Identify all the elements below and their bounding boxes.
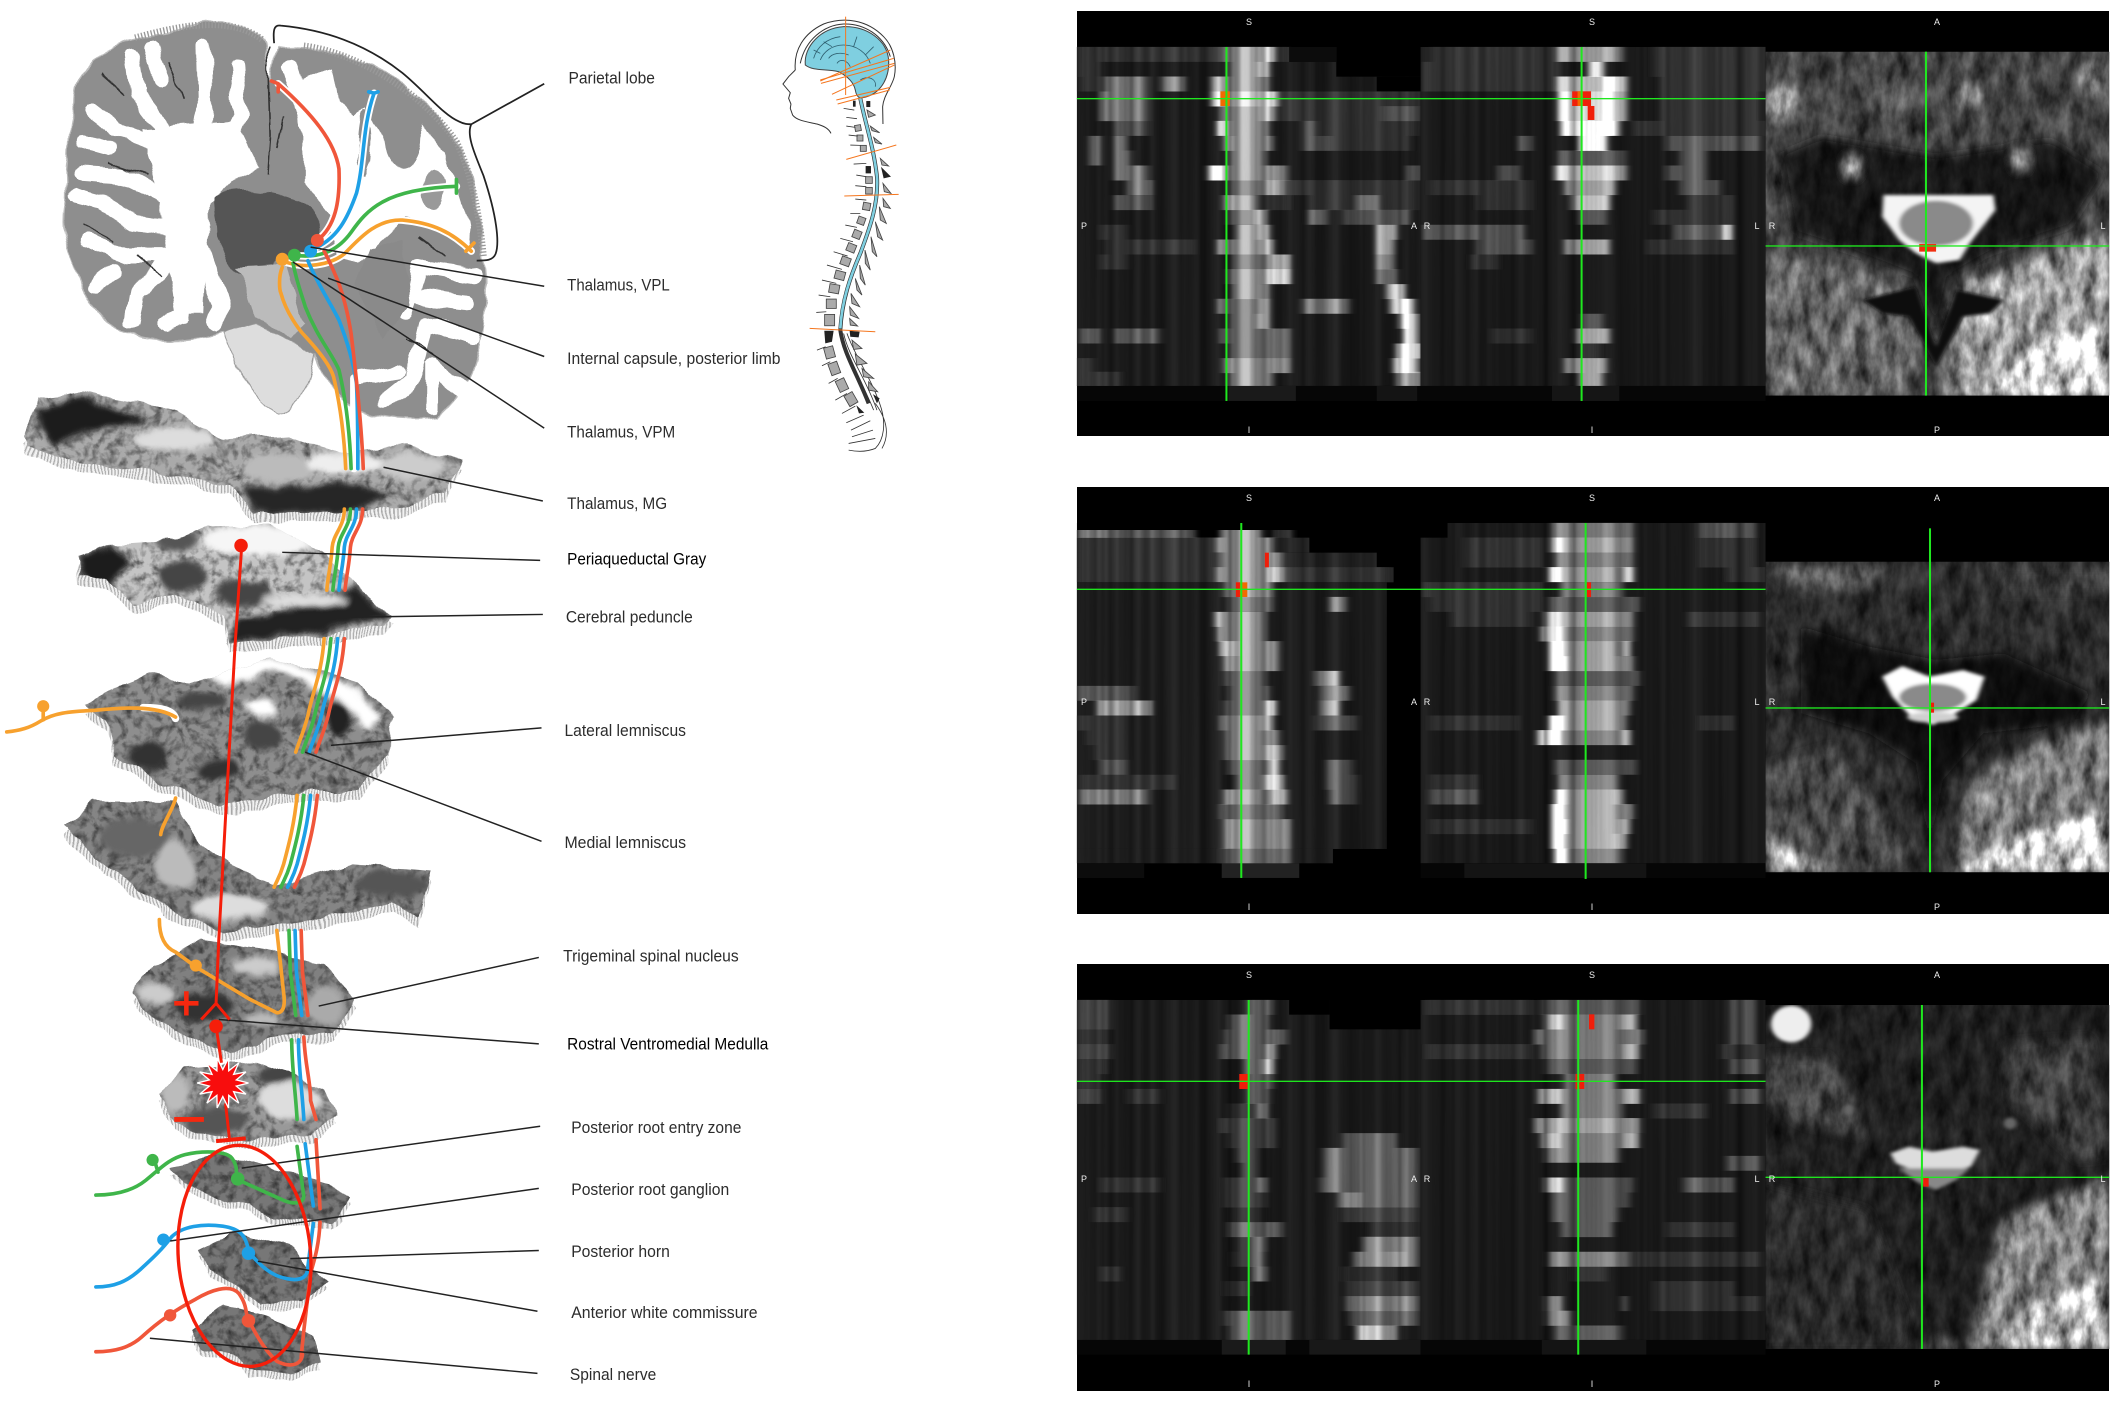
label: Posterior root entry zone: Posterior root entry zone xyxy=(571,1118,741,1137)
orientation letters set 3: P xyxy=(1934,1379,1940,1389)
orientation letters set 2: I xyxy=(1248,902,1250,912)
orientation letters set 1: S xyxy=(1246,17,1252,27)
label: Parietal lobe: Parietal lobe xyxy=(569,69,655,88)
label: Medial lemniscus: Medial lemniscus xyxy=(564,833,686,852)
first-order afferent: blue xyxy=(96,1223,313,1287)
crosshairs xyxy=(1077,47,2109,401)
lumbar cord slice xyxy=(189,1306,321,1380)
bracket: parietal lobe xyxy=(274,25,544,261)
panel: MRI set 2 xyxy=(1077,487,2109,914)
label: Thalamus, VPM: Thalamus, VPM xyxy=(567,423,675,442)
orientation letters set 3: P xyxy=(1081,1174,1087,1184)
orientation letters set 1: I xyxy=(1591,425,1593,435)
orientation letters set 1: R xyxy=(1769,221,1776,231)
label: Posterior horn: Posterior horn xyxy=(571,1242,670,1261)
label: Spinal nerve: Spinal nerve xyxy=(570,1365,656,1384)
pons slice xyxy=(84,657,392,816)
orientation letters set 2: L xyxy=(1754,697,1760,707)
upper medulla slice xyxy=(63,801,432,941)
orientation letters set 1: I xyxy=(1248,425,1250,435)
orientation letters set 3: R xyxy=(1769,1174,1776,1184)
label: Anterior white commissure: Anterior white commissure xyxy=(571,1303,758,1322)
cervical cord slice xyxy=(173,1155,348,1229)
coronal view xyxy=(1421,1000,1766,1355)
caudal medulla slice xyxy=(159,1060,338,1149)
orientation letters set 2: I xyxy=(1591,902,1593,912)
orientation letters set 2: R xyxy=(1769,697,1776,707)
orientation letters set 1: R xyxy=(1424,221,1431,231)
label: Trigeminal spinal nucleus: Trigeminal spinal nucleus xyxy=(563,946,739,965)
label: Internal capsule: Internal capsule, posterior limb xyxy=(567,349,781,368)
orientation letters set 2: A xyxy=(1934,493,1940,503)
leader lines xyxy=(150,247,544,1373)
label: Thalamus, MG: Thalamus, MG xyxy=(567,494,667,513)
orientation letters set 1: P xyxy=(1081,221,1087,231)
orientation letters set 2: P xyxy=(1934,902,1940,912)
sagittal view xyxy=(1077,1000,1421,1355)
orientation letters set 1 xyxy=(1081,17,2106,435)
orientation letters set 1: L xyxy=(1754,221,1760,231)
axial view xyxy=(1764,52,2111,396)
orientation letters set 1: A xyxy=(1411,221,1417,231)
label: Rostral Ventromedial Medulla: Rostral Ventromedial Medulla xyxy=(567,1034,769,1053)
crosshairs xyxy=(1077,1000,2109,1355)
orientation letters set 2: S xyxy=(1246,493,1252,503)
orientation letters set 3: I xyxy=(1248,1379,1250,1389)
orientation letters set 3: A xyxy=(1934,970,1940,980)
orientation letters set 2: L xyxy=(2100,697,2106,707)
midbrain slice xyxy=(77,524,394,652)
plus sign xyxy=(174,991,199,1016)
coronal view xyxy=(1421,523,1766,878)
orientation letters set 3 xyxy=(1081,970,2106,1389)
orientation letters set 3: I xyxy=(1591,1379,1593,1389)
orientation letters set 1: P xyxy=(1934,425,1940,435)
orientation letters set 1: L xyxy=(2100,221,2106,231)
label: Cerebral peduncle: Cerebral peduncle xyxy=(566,608,693,627)
label: Lateral lemniscus: Lateral lemniscus xyxy=(564,721,686,740)
tract bundles between slices xyxy=(274,509,363,1357)
orientation letters set 3: L xyxy=(2100,1174,2106,1184)
orientation letters set 2: S xyxy=(1589,493,1595,503)
rostral medulla slice xyxy=(131,941,355,1061)
orientation letters set 1: S xyxy=(1589,17,1595,27)
orientation letters set 2: P xyxy=(1081,697,1087,707)
first-order afferent: green xyxy=(96,1152,281,1199)
orientation letters set 3: A xyxy=(1411,1174,1417,1184)
panel: ascending pain pathway anatomy xyxy=(7,17,899,1384)
descending modulatory pathway xyxy=(197,539,248,1141)
coronal view xyxy=(1421,47,1766,401)
label: Thalamus, VPL: Thalamus, VPL xyxy=(567,275,670,294)
sagittal view xyxy=(1077,47,1421,401)
axial view xyxy=(1766,1005,2109,1349)
ellipse: region of interest xyxy=(170,1140,319,1371)
first-order afferent: red xyxy=(96,1288,302,1365)
panel: MRI set 3 xyxy=(1077,964,2109,1391)
brain coronal section xyxy=(63,21,486,420)
trigeminal afferent xyxy=(7,700,284,1013)
thalamic slice xyxy=(23,390,459,523)
axial view xyxy=(1766,562,2109,872)
orientation letters set 2: A xyxy=(1411,697,1417,707)
panel: MRI set 1 xyxy=(1077,11,2111,436)
orientation letters set 3: L xyxy=(1754,1174,1760,1184)
orientation letters set 1: A xyxy=(1934,17,1940,27)
orientation letters set 3: S xyxy=(1246,970,1252,980)
ascending tracts in the brain xyxy=(271,81,474,469)
label: Posterior root ganglion: Posterior root ganglion xyxy=(571,1180,729,1199)
label: Periaqueductal Gray: Periaqueductal Gray xyxy=(567,549,707,568)
crosshairs xyxy=(1077,523,2109,879)
minus sign xyxy=(174,1118,204,1121)
orientation letters set 3: R xyxy=(1424,1174,1431,1184)
orientation letters set 3: S xyxy=(1589,970,1595,980)
thoracic cord slice xyxy=(200,1232,327,1310)
icon: head and spine with slice planes xyxy=(783,17,899,451)
orientation letters set 2: R xyxy=(1424,697,1431,707)
orientation letters set 2 xyxy=(1081,493,2106,912)
sagittal view xyxy=(1077,523,1421,878)
